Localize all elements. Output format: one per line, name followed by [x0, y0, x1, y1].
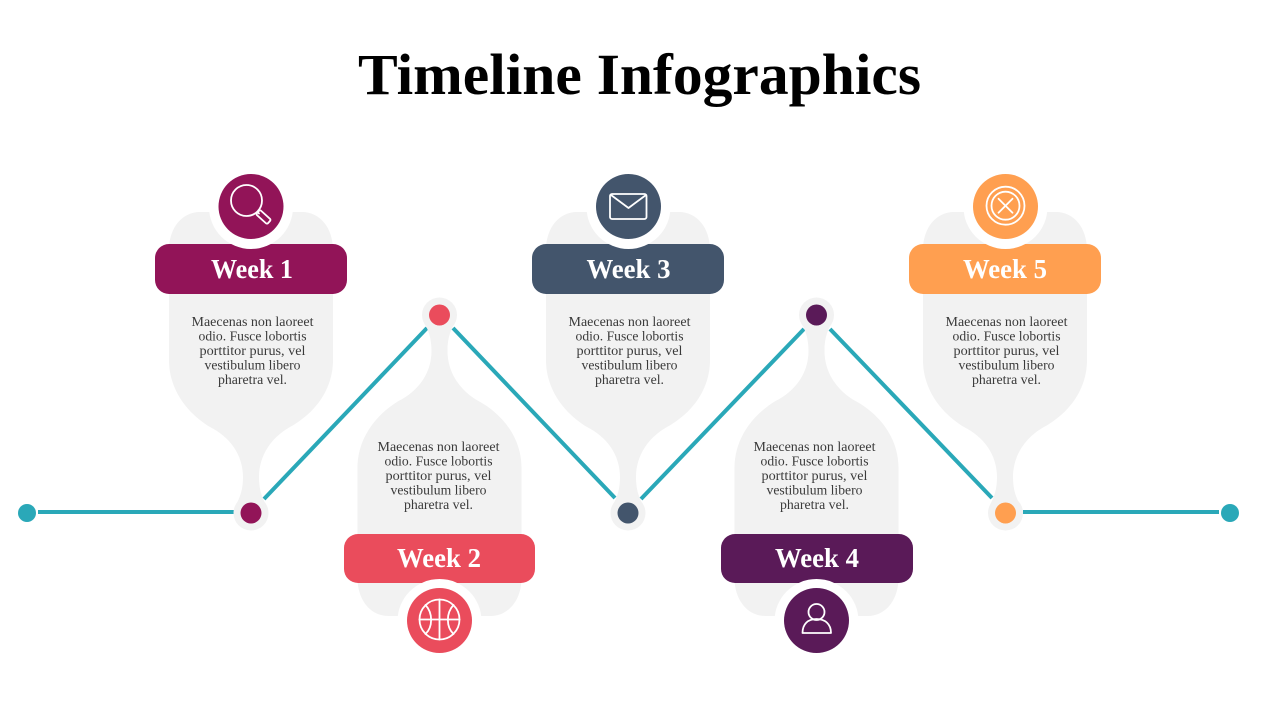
- panel: week 5: [909, 165, 1101, 530]
- banner label: Week 3: [586, 254, 670, 284]
- body text: porttitor purus, vel: [200, 343, 306, 358]
- body text: pharetra vel.: [780, 497, 849, 512]
- timeline start dot: [18, 504, 36, 522]
- timeline node: [234, 496, 268, 530]
- body text: Maecenas non laoreet: [946, 314, 1068, 329]
- banner: [532, 244, 724, 294]
- body text: porttitor purus, vel: [762, 468, 868, 483]
- timeline end dot: [1221, 504, 1239, 522]
- timeline node: [610, 496, 646, 530]
- card shape: [734, 323, 898, 616]
- body text: odio. Fusce lobortis: [198, 328, 306, 344]
- body text: pharetra vel.: [404, 497, 473, 512]
- timeline connector line: [38, 328, 1219, 512]
- timeline node: [799, 298, 834, 332]
- body text: [192, 314, 314, 387]
- banner: [155, 244, 347, 294]
- body text: odio. Fusce lobortis: [760, 454, 868, 468]
- body text: [754, 439, 876, 512]
- banner label: Week 5: [963, 254, 1047, 284]
- panel: week 4: [721, 298, 913, 663]
- body text: pharetra vel.: [595, 372, 664, 387]
- panel: week 3: [532, 165, 724, 530]
- body text: porttitor purus, vel: [954, 343, 1060, 358]
- body text: odio. Fusce lobortis: [384, 454, 492, 468]
- body text: pharetra vel.: [218, 372, 287, 387]
- body text: [378, 439, 500, 512]
- body text: Maecenas non laoreet: [754, 439, 876, 454]
- card shape: [546, 212, 710, 505]
- body text: vestibulum libero: [766, 482, 863, 498]
- card shape: [923, 212, 1087, 505]
- banner: [721, 534, 913, 583]
- card shape: [358, 323, 522, 616]
- body text: Maecenas non laoreet: [568, 314, 691, 329]
- body text: vestibulum libero: [390, 482, 487, 498]
- body text: [568, 314, 691, 387]
- icon: basketball: [398, 579, 482, 663]
- banner label: Week 1: [211, 254, 293, 284]
- title: Timeline Infographics: [358, 42, 921, 107]
- body text: Maecenas non laoreet: [192, 314, 314, 329]
- body text: odio. Fusce lobortis: [576, 328, 684, 344]
- body text: Maecenas non laoreet: [378, 439, 500, 454]
- icon: person: [774, 579, 858, 663]
- body text: pharetra vel.: [972, 372, 1041, 387]
- banner: [344, 534, 535, 583]
- panel: week 1: [155, 165, 347, 530]
- timeline node: [422, 298, 457, 332]
- card shape: [169, 212, 333, 505]
- icon: envelope: [586, 165, 670, 249]
- body text: vestibulum libero: [958, 358, 1055, 372]
- body text: vestibulum libero: [582, 358, 678, 372]
- banner: [909, 244, 1101, 294]
- banner label: Week 2: [397, 543, 481, 573]
- body text: vestibulum libero: [204, 358, 301, 372]
- timeline node: [988, 496, 1023, 530]
- panel: week 2: [344, 298, 535, 663]
- icon: magnifier: [209, 165, 293, 249]
- body text: porttitor purus, vel: [386, 468, 492, 483]
- banner label: Week 4: [775, 543, 859, 573]
- body text: [946, 314, 1068, 387]
- icon: cancel target: [964, 165, 1048, 249]
- body text: porttitor purus, vel: [576, 343, 683, 358]
- body text: odio. Fusce lobortis: [952, 328, 1060, 344]
